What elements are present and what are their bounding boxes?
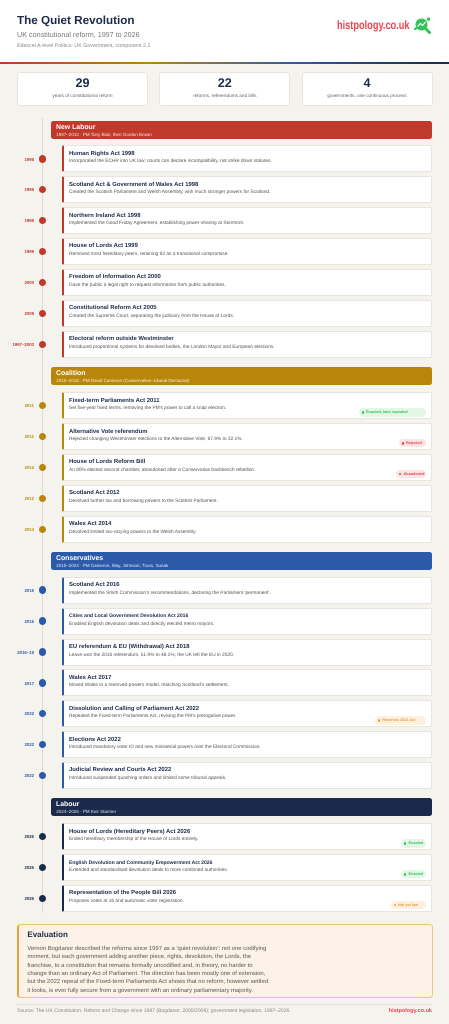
course tag: Edexcel A-level Politics: UK Government, component 2.2 xyxy=(17,43,150,49)
event: Dissolution and Calling of Parliament Act: Reverses 2011 Act xyxy=(382,718,416,722)
event: Wales Act 2017 xyxy=(24,669,432,696)
event: EU referendum and Withdrawal Act: Leave won the 2016 referendum, 51.9% to 48.1%; the UK left the EU in 2020. xyxy=(69,653,234,658)
timeline spine xyxy=(42,118,43,913)
event: House of Lords Act: House of Lords Act 1999 xyxy=(69,243,138,249)
event: EU referendum and Withdrawal Act: EU referendum & EU (Withdrawal) Act 2018 xyxy=(69,644,190,650)
event: Wales Act 2014 xyxy=(24,516,432,543)
event: Cities and Local Government Devolution Act: Cities and Local Government Devolution Act 2016 xyxy=(69,613,188,619)
event: Scotland and Wales Acts xyxy=(24,176,432,203)
event: Scotland Act 2016 xyxy=(24,577,432,604)
event: Constitutional Reform Act: Constitutional Reform Act 2005 xyxy=(69,305,156,311)
event: Scotland Act 2012 xyxy=(24,485,432,512)
era band: Conservatives xyxy=(50,552,432,570)
event: Elections Act 2022: Introduced mandatory voter ID and new ministerial powers over the Electoral Commission. xyxy=(69,745,261,750)
era band: Coalition: 2010–2015 · PM David Cameron (Conservative–Liberal Democrat) xyxy=(56,378,189,383)
event: Wales Act 2017: Moved Wales to a reserved-powers model, matching Scotland's settlement. xyxy=(69,683,229,688)
event: Freedom of Information Act: Freedom of Information Act 2000 xyxy=(69,274,161,280)
stat: reforms: 22 xyxy=(218,76,232,90)
event: Elections Act 2022 xyxy=(24,731,432,758)
icon: magnifying glass with chart xyxy=(414,18,432,34)
event: Wales Act 2017: 2017 xyxy=(24,681,34,686)
era band: Labour: Labour xyxy=(56,801,79,808)
event: English Devolution and Community Empowerment Act: 2026 xyxy=(24,865,34,870)
event: Northern Ireland Act xyxy=(24,207,432,234)
era band: New Labour xyxy=(50,121,432,139)
event: Northern Ireland Act: Northern Ireland Act 1998 xyxy=(69,213,140,219)
event: Judicial Review and Courts Act: Introduced suspended quashing orders and limited some tribunal appeals. xyxy=(69,776,226,781)
event: English Devolution and Community Empowerment Act: Extended and standardised devolution deals to more combined authorities. xyxy=(69,868,228,873)
event: Alternative Vote referendum: Rejected changing Westminster elections to the Alternative Vote, 67.9% to 32.1%. xyxy=(69,437,243,442)
event: English Devolution and Community Empowerment Act: Enacted xyxy=(409,872,423,876)
event: Wales Act 2014: Wales Act 2014 xyxy=(69,521,111,527)
evaluation text: it looks, is ever fully secure from a government with an ordinary parliamentary majority. xyxy=(27,988,253,994)
evaluation text: franchise, to a constitution that remains formally uncodified and, in theory, no harder to xyxy=(27,963,253,969)
era band: Coalition: Coalition xyxy=(56,370,85,377)
event: Scotland and Wales Acts: Scotland Act & Government of Wales Act 1998 xyxy=(69,182,198,188)
era band: Labour: 2024–2026 · PM Keir Starmer xyxy=(56,809,116,814)
header band xyxy=(0,0,449,62)
event: House of Lords (Hereditary Peers) Act: House of Lords (Hereditary Peers) Act 2026 xyxy=(69,829,190,835)
event: Northern Ireland Act: 1998 xyxy=(24,218,34,223)
event: Freedom of Information Act: Gave the public a legal right to request information from public authorities. xyxy=(69,283,226,288)
event: Representation of the People Bill: Representation of the People Bill 2026 xyxy=(69,890,176,896)
source note: Source: The UK Constitution: Reform and Change since 1997 (Bogdanor, 2005/2009); government legislation, 1997–2026. xyxy=(17,1008,291,1014)
event: Scotland and Wales Acts: 1998 xyxy=(24,187,34,192)
era band: Conservatives: Conservatives xyxy=(56,555,103,562)
event: Dissolution and Calling of Parliament Act: 2022 xyxy=(24,711,34,716)
footer brand: histpology.co.uk xyxy=(389,1008,432,1014)
event: Dissolution and Calling of Parliament Act xyxy=(24,700,432,727)
event: Constitutional Reform Act: 2005 xyxy=(24,311,34,316)
event: Fixed-term Parliaments Act: 2011 xyxy=(25,403,34,408)
stat: governments xyxy=(302,72,432,106)
event: Scotland Act 2016: Implemented the Smith Commission's recommendations, declaring the Parliament 'permanent'. xyxy=(69,591,271,596)
event: Electoral reform xyxy=(12,331,432,358)
event: House of Lords (Hereditary Peers) Act: Ended hereditary membership of the House of Lords entirely. xyxy=(69,837,198,842)
event: Constitutional Reform Act xyxy=(24,300,432,327)
stat: governments: governments, one continuous process xyxy=(327,93,407,98)
event: Freedom of Information Act: 2000 xyxy=(24,280,34,285)
event: EU referendum and Withdrawal Act xyxy=(17,639,432,666)
event: Scotland Act 2012: Scotland Act 2012 xyxy=(69,490,120,496)
event: EU referendum and Withdrawal Act: 2016–18 xyxy=(17,650,34,655)
event: House of Lords Act: Removed most hereditary peers, retaining 92 as a transitional compromise. xyxy=(69,252,229,257)
era band: Coalition xyxy=(50,367,432,385)
event: Electoral reform: 1997–2003 xyxy=(12,342,34,347)
title: The Quiet Revolution xyxy=(17,14,135,27)
evaluation text xyxy=(27,946,268,994)
event: Cities and Local Government Devolution Act xyxy=(24,608,432,635)
event: House of Lords (Hereditary Peers) Act: Enacted xyxy=(409,841,423,845)
event: Wales Act 2017: Wales Act 2017 xyxy=(69,675,111,681)
stat: years: years of constitutional reform xyxy=(52,93,113,98)
event: Judicial Review and Courts Act: 2022 xyxy=(24,773,34,778)
event: Human Rights Act xyxy=(24,145,432,172)
event: Elections Act 2022: 2022 xyxy=(24,742,34,747)
panel: evaluation xyxy=(17,924,432,998)
event: Judicial Review and Courts Act: Judicial Review and Courts Act 2022 xyxy=(69,767,171,773)
event: House of Lords Reform Bill xyxy=(24,454,432,481)
event: Judicial Review and Courts Act xyxy=(24,762,432,789)
event: House of Lords Act: 1999 xyxy=(24,249,34,254)
era band: Labour xyxy=(50,798,432,816)
event: Fixed-term Parliaments Act: Fixed-term Parliaments Act 2011 xyxy=(69,398,159,404)
event: House of Lords Reform Bill: House of Lords Reform Bill xyxy=(69,459,145,465)
era band: Conservatives: 2015–2024 · PM Cameron, May, Johnson, Truss, Sunak xyxy=(56,563,168,568)
event: Scotland and Wales Acts: Created the Scottish Parliament and Welsh Assembly, with much stronger powers for Scotland. xyxy=(69,190,270,195)
era band: New Labour: 1997–2010 · PM Tony Blair, then Gordon Brown xyxy=(56,132,152,137)
stat: reforms xyxy=(159,72,290,106)
event: House of Lords Reform Bill: 2012 xyxy=(24,465,34,470)
event: Representation of the People Bill xyxy=(24,885,432,912)
event: English Devolution and Community Empowerment Act: English Devolution and Community Empowerment Act 2026 xyxy=(69,860,212,866)
event: Human Rights Act: Human Rights Act 1998 xyxy=(69,151,135,157)
event: Electoral reform: Introduced proportional systems for devolved bodies, the London Mayor and European elections. xyxy=(69,345,275,350)
evaluation text: but the 2022 repeal of the Fixed-term Parliaments Act shows that no reform, however settled xyxy=(27,979,268,985)
gradient rule xyxy=(0,62,449,64)
event: Fixed-term Parliaments Act: Set five-year fixed terms, removing the PM's power to call a snap election. xyxy=(69,406,226,411)
event: Scotland Act 2016: 2016 xyxy=(24,588,34,593)
stat: reforms: reforms, referendums and bills xyxy=(193,93,256,98)
event: Human Rights Act: 1998 xyxy=(24,157,34,162)
stat: years xyxy=(17,72,148,106)
event: Dissolution and Calling of Parliament Act: Repealed the Fixed-term Parliaments Act, reviving the PM's prerogative power. xyxy=(69,714,236,719)
event: House of Lords (Hereditary Peers) Act: 2026 xyxy=(24,834,34,839)
event: Scotland Act 2012: Devolved further tax and borrowing powers to the Scottish Parliament. xyxy=(69,499,218,504)
evaluation text: change than an ordinary Act of Parliament. The direction has been mostly one of extension, xyxy=(27,971,265,977)
event: Cities and Local Government Devolution Act: 2016 xyxy=(24,619,34,624)
event: Alternative Vote referendum: 2011 xyxy=(25,434,34,439)
event: House of Lords Reform Bill: An 80% elected second chamber, abandoned after a Conservative backbench rebellion. xyxy=(69,468,255,473)
event: Wales Act 2014: Devolved limited tax-varying powers to the Welsh Assembly. xyxy=(69,530,197,535)
era band: New Labour: New Labour xyxy=(56,124,95,131)
event: Freedom of Information Act xyxy=(24,269,432,296)
evaluation text: moment, but each government adding another piece, rights, devolution, the Lords, the xyxy=(27,954,251,960)
event: Fixed-term Parliaments Act xyxy=(24,392,432,419)
event: Representation of the People Bill: 2026 xyxy=(24,896,34,901)
event: House of Lords Reform Bill: Abandoned xyxy=(404,472,424,476)
event: Wales Act 2014: 2014 xyxy=(24,527,34,532)
event: English Devolution and Community Empowerment Act xyxy=(24,854,432,881)
subtitle: UK constitutional reform, 1997 to 2026 xyxy=(17,30,140,38)
event: Human Rights Act: Incorporated the ECHR into UK law; courts can declare incompatibility, not strike down statutes. xyxy=(69,159,272,164)
event: Alternative Vote referendum: Rejected xyxy=(406,441,422,445)
event: Representation of the People Bill: Not yet law xyxy=(398,903,418,907)
event: Fixed-term Parliaments Act: Enacted, later repealed xyxy=(366,410,408,414)
evaluation heading: Evaluation xyxy=(27,930,68,939)
event: Dissolution and Calling of Parliament Act: Dissolution and Calling of Parliament Act 2022 xyxy=(69,706,199,712)
event: Elections Act 2022: Elections Act 2022 xyxy=(69,737,121,743)
event: Alternative Vote referendum xyxy=(24,423,432,450)
event: Scotland Act 2012: 2012 xyxy=(24,496,34,501)
stat: years: 29 xyxy=(75,76,90,90)
event: Representation of the People Bill: Proposes votes at 16 and automatic voter registration. xyxy=(69,899,184,904)
event: House of Lords (Hereditary Peers) Act xyxy=(24,823,432,850)
event: Scotland Act 2016: Scotland Act 2016 xyxy=(69,582,120,588)
event: Constitutional Reform Act: Created the Supreme Court, separating the judiciary from the House of Lords. xyxy=(69,314,234,319)
stat: governments: 4 xyxy=(363,76,370,90)
event: Alternative Vote referendum: Alternative Vote referendum xyxy=(69,429,147,435)
event: Northern Ireland Act: Implemented the Good Friday Agreement, establishing power-sharing at Stormont. xyxy=(69,221,244,226)
event: House of Lords Act xyxy=(24,238,432,265)
evaluation text: Vernon Bogdanor described the reforms since 1997 as a 'quiet revolution': not one codifying xyxy=(27,946,266,952)
event: Electoral reform: Electoral reform outside Westminster xyxy=(69,336,174,342)
event: Cities and Local Government Devolution Act: Enabled English devolution deals and directly elected metro mayors. xyxy=(69,622,214,627)
